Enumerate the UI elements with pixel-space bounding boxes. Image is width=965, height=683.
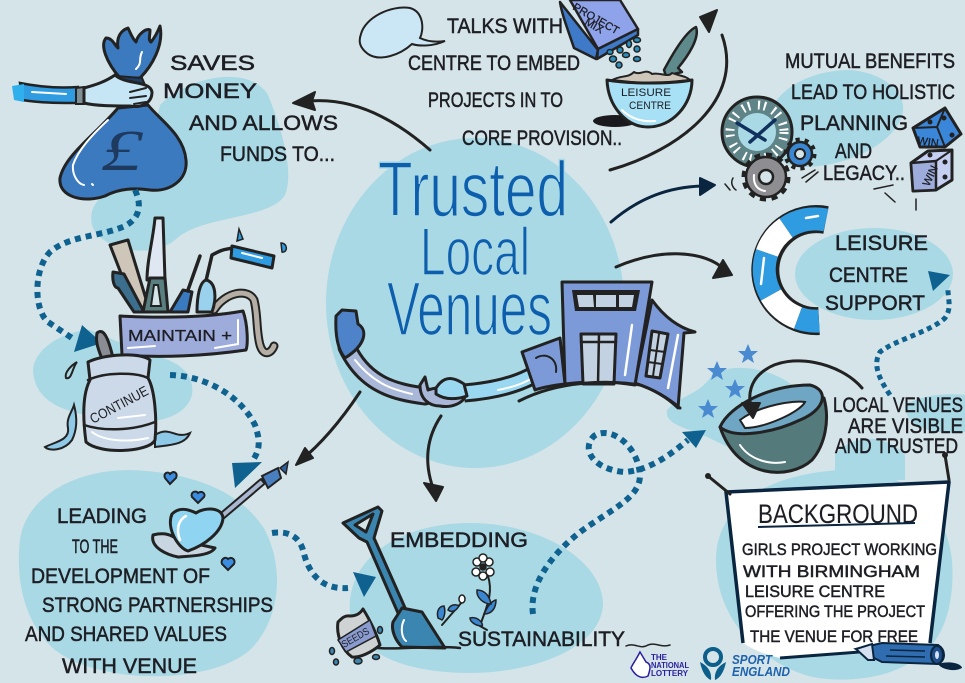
icon: heart brush bbox=[153, 462, 288, 570]
text: leading to strong partnerships bbox=[25, 505, 273, 678]
icon: maintain toolkit: MAINTAIN + bbox=[128, 328, 232, 345]
arrow: centre to partnerships bbox=[296, 392, 360, 465]
logo: the national lottery: NATIONAL bbox=[651, 661, 689, 670]
logo: sport england: ENGLAND bbox=[732, 664, 791, 679]
text: embedding sustainability bbox=[390, 529, 670, 651]
text: leisure centre support bbox=[825, 232, 928, 315]
text: leisure centre support: CENTRE bbox=[829, 264, 908, 287]
text: talks with centre: CORE PROVISION.. bbox=[462, 127, 622, 150]
text: leisure centre support: SUPPORT bbox=[825, 292, 925, 315]
text: embedding sustainability: SUSTAINABILITY bbox=[458, 628, 625, 651]
icon: pound sign: £ bbox=[101, 118, 144, 183]
icon: win dice: WIN bbox=[917, 135, 939, 150]
text: leading to strong partnerships: STRONG PARTNERSHIPS bbox=[42, 594, 273, 617]
title: Local bbox=[420, 214, 530, 290]
arrow: centre to clock bbox=[611, 178, 715, 222]
icon: life ring bbox=[761, 216, 826, 321]
icon: speech bubble bbox=[360, 8, 445, 57]
icon: pencil bbox=[856, 643, 962, 670]
text: mutual benefits bbox=[785, 50, 955, 185]
text: mutual benefits: PLANNING bbox=[800, 112, 908, 135]
panel: background bbox=[705, 452, 949, 658]
text: leading to strong partnerships: DEVELOPMENT OF bbox=[31, 565, 210, 588]
logo: the national lottery bbox=[631, 652, 689, 678]
dotted arrow: local venues to leisure centre bbox=[877, 271, 950, 395]
icon: venue building bbox=[519, 282, 695, 408]
icon: project mix box and bowl bbox=[560, 0, 697, 127]
dotted arrow: sustainability to bowl bbox=[532, 430, 706, 614]
text: talks with centre bbox=[408, 15, 622, 150]
text: leading to strong partnerships: AND SHARED VALUES bbox=[25, 623, 227, 646]
text: leisure centre support: LEISURE bbox=[835, 232, 928, 255]
logo: the national lottery: THE bbox=[651, 653, 668, 662]
text: saves money: SAVES bbox=[170, 52, 255, 75]
icon: project mix box and bowl: MIX bbox=[582, 16, 606, 37]
arm handshake bbox=[336, 310, 552, 406]
icon: stars bbox=[698, 344, 758, 418]
icon: bowl with arrow bbox=[720, 361, 862, 472]
text: talks with centre: CENTRE TO EMBED bbox=[408, 52, 580, 75]
icon: maintain toolkit bbox=[110, 218, 286, 356]
icon: continue jar: CONTINUE bbox=[87, 382, 151, 427]
icon: money bag with hand bbox=[12, 26, 186, 199]
text: talks with centre: TALKS WITH bbox=[447, 15, 563, 38]
icon: project mix box and bowl: PROJECT bbox=[570, 1, 621, 37]
text: saves money: AND ALLOWS bbox=[189, 112, 338, 135]
icon: project mix box and bowl: CENTRE bbox=[629, 100, 671, 112]
icon: shovel, seeds and plants: SEEDS bbox=[340, 626, 372, 651]
logo: sport england bbox=[700, 649, 791, 680]
icon: win dice bbox=[874, 108, 961, 210]
icon: clock and gears bbox=[722, 97, 818, 199]
body text bbox=[742, 540, 937, 646]
text: saves money: MONEY bbox=[163, 80, 257, 103]
title: Venues bbox=[387, 267, 552, 352]
title: Trusted bbox=[378, 145, 568, 233]
text: talks with centre: PROJECTS IN TO bbox=[428, 89, 563, 112]
text: mutual benefits: LEGACY.. bbox=[823, 162, 905, 185]
text: saves money: FUNDS TO... bbox=[220, 143, 335, 166]
arrow: centre to embedding bbox=[424, 416, 443, 501]
logo: sport england: SPORT bbox=[732, 652, 773, 667]
heading: BACKGROUND bbox=[758, 499, 918, 529]
dotted arrow: partnerships to shovel bbox=[272, 532, 376, 597]
body text: OFFERING THE PROJECT bbox=[745, 602, 925, 621]
text: leading to strong partnerships: LEADING bbox=[57, 505, 147, 528]
logo: the national lottery: LOTTERY bbox=[651, 669, 689, 678]
text: local venues visible bbox=[833, 394, 963, 458]
dotted arrow: bag to toolkit bbox=[37, 190, 139, 352]
dotted arrow: jar to brush bbox=[170, 375, 262, 488]
arrow: centre to leisure centre support bbox=[616, 254, 732, 278]
text: saves money bbox=[163, 52, 338, 166]
text: leading to strong partnerships: WITH VENUE bbox=[62, 655, 197, 678]
icon: win dice: WIN bbox=[921, 164, 941, 188]
text: mutual benefits: AND bbox=[835, 140, 872, 163]
body text: WITH BIRMINGHAM bbox=[743, 562, 920, 581]
title bbox=[378, 145, 568, 352]
arrow: centre to mutual benefits top bbox=[610, 10, 727, 170]
body text: LEISURE CENTRE bbox=[745, 582, 885, 601]
text: leading to strong partnerships: TO THE bbox=[72, 537, 118, 558]
arrow: centre to saves money bbox=[293, 92, 430, 150]
body text: THE VENUE FOR FREE bbox=[750, 627, 918, 646]
body text: GIRLS PROJECT WORKING bbox=[742, 540, 937, 559]
text: embedding sustainability: EMBEDDING bbox=[390, 529, 528, 552]
icon: shovel, seeds and plants bbox=[330, 507, 496, 665]
icon: continue jar bbox=[45, 332, 190, 450]
icon: project mix box and bowl: LEISURE bbox=[621, 87, 671, 99]
